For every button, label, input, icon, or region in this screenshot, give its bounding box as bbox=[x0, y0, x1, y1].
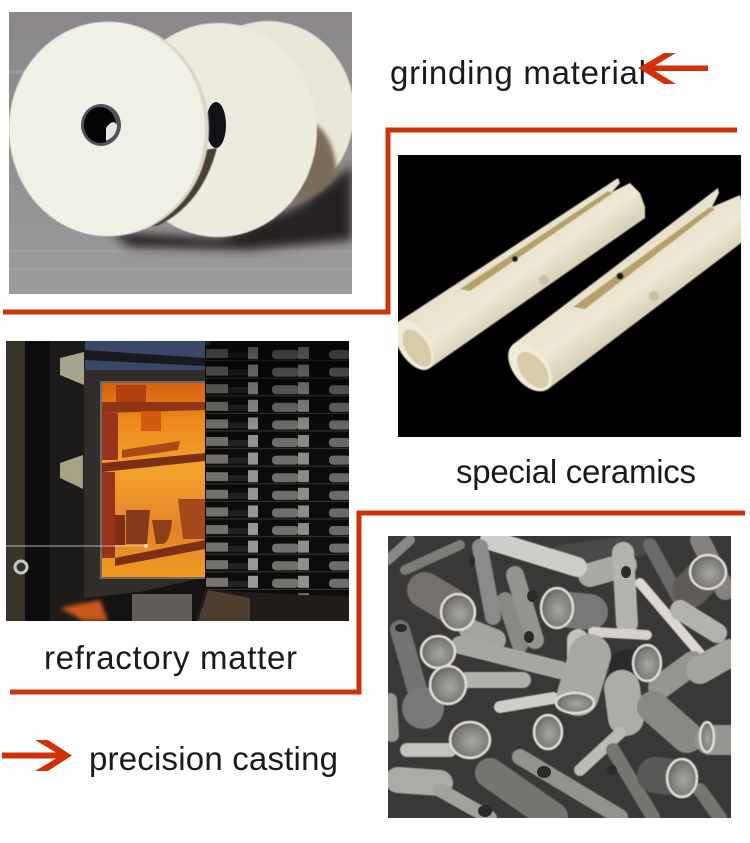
photo: grinding wheels bbox=[9, 12, 354, 294]
kiln hinges bbox=[60, 352, 84, 489]
casting holes bbox=[395, 555, 631, 817]
heading: precision casting: precision casting bbox=[89, 740, 338, 777]
divider line: lower bbox=[10, 513, 745, 692]
kiln rack bbox=[205, 345, 349, 595]
kiln base glow bbox=[60, 600, 108, 621]
casting rings bbox=[421, 555, 726, 797]
divider line: upper bbox=[3, 130, 737, 312]
casting bars bbox=[388, 540, 731, 818]
photo: refractory kiln bbox=[6, 341, 349, 621]
photo: special ceramic tubes bbox=[386, 155, 745, 437]
photo: precision castings bbox=[388, 536, 731, 818]
arrow: pointing left bbox=[638, 53, 708, 84]
heading: grinding material: grinding material bbox=[390, 54, 646, 91]
heading: special ceramics: special ceramics bbox=[456, 453, 696, 490]
kiln door frame bbox=[84, 370, 206, 598]
tube: left bbox=[386, 178, 645, 377]
heading: refractory matter: refractory matter bbox=[44, 639, 297, 676]
arrow: pointing right bbox=[2, 740, 72, 771]
tube: right bbox=[499, 188, 745, 400]
kiln window with fire bbox=[102, 383, 206, 577]
